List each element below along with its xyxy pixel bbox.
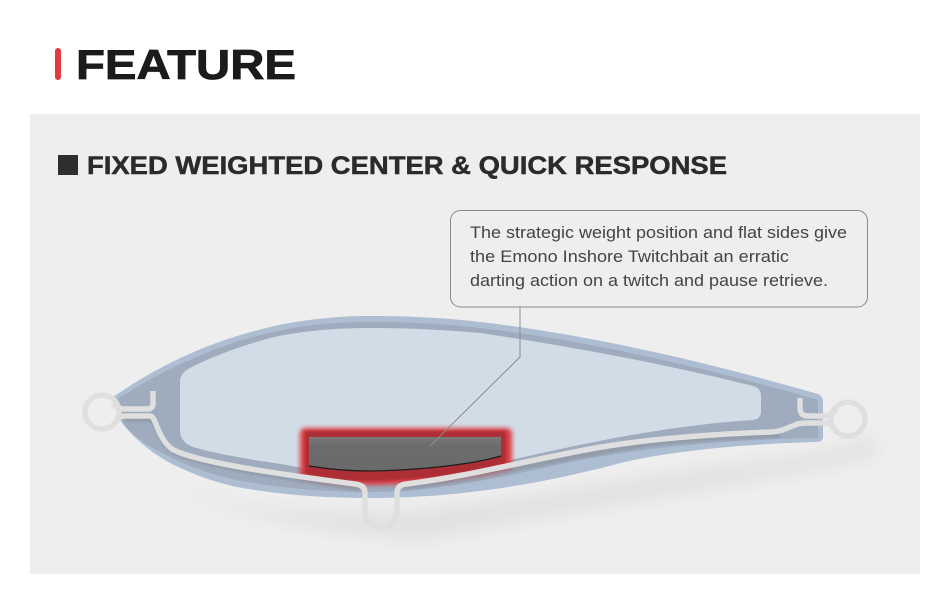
callout: the Emono Inshore Twitchbait an erratic xyxy=(470,248,789,266)
lure diagram xyxy=(85,307,880,540)
weight bottom edge xyxy=(309,456,501,471)
subheading xyxy=(58,152,727,180)
weight glow xyxy=(301,429,511,484)
icon: red title bar xyxy=(55,48,61,80)
main wire with belly loop xyxy=(116,416,834,528)
right eye and hook xyxy=(831,402,865,436)
callout: The strategic weight position and flat sides give xyxy=(470,224,847,242)
wire frame xyxy=(85,391,865,528)
lure shadow xyxy=(170,436,880,540)
title xyxy=(55,41,296,88)
leader line xyxy=(430,307,520,446)
lure body outer xyxy=(113,316,823,498)
subheading text: FIXED WEIGHTED CENTER & QUICK RESPONSE xyxy=(87,152,727,180)
weight xyxy=(309,437,501,471)
title text: FEATURE xyxy=(76,41,296,88)
icon: dark square xyxy=(58,155,78,175)
lure body inner band xyxy=(116,322,818,492)
wire shadow xyxy=(125,419,780,489)
panel: feature xyxy=(30,114,920,574)
lure transparent window xyxy=(180,328,761,474)
left eye and hook xyxy=(85,395,119,429)
callout: darting action on a twitch and pause retrieve. xyxy=(470,272,828,290)
callout xyxy=(450,210,868,307)
